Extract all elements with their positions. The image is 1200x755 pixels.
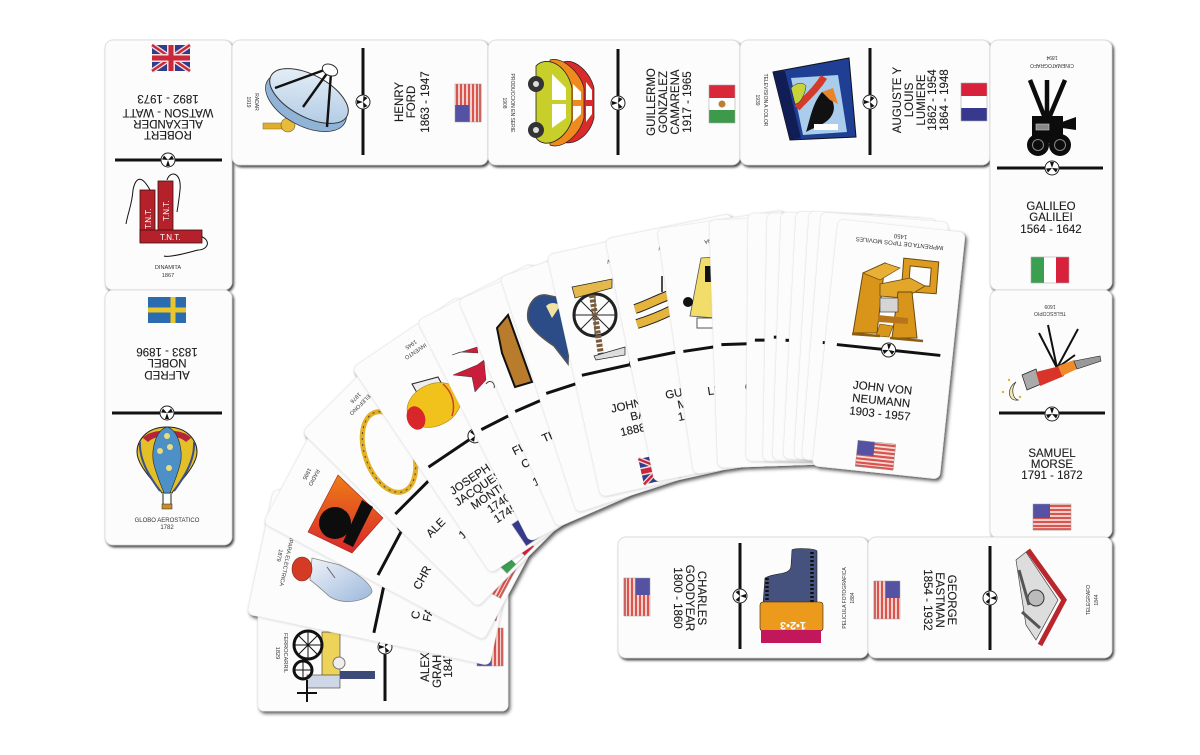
fan card: red swallow, FL: 1	[531, 476, 542, 489]
fan card: John Logie Baird, wheel press	[547, 227, 726, 497]
domino: Guillermo Gonzalez Camarena, mass production: GONZALEZ	[658, 71, 670, 133]
fan card: electric lamp: 1879	[275, 549, 283, 562]
icon: brown slab	[497, 315, 532, 387]
fan card: Alexander Graham Bell, railway: FERROCARRIL	[282, 633, 288, 673]
domino: Galileo Galilei, cinematograph	[990, 40, 1112, 290]
domino: Auguste y Louis Lumiere, color television	[740, 40, 990, 165]
fan card: radio: CHR	[412, 564, 434, 592]
domino: Robert Alexander Watson-Watt, dynamite	[105, 40, 232, 290]
icon: dynamite sticks: T.N.T.	[160, 233, 180, 242]
domino: Galileo Galilei, cinematograph: CINEMATOGRAFO	[1030, 62, 1074, 68]
domino: Henry Ford, radar: HENRY	[394, 82, 406, 122]
domino: Auguste y Louis Lumiere, color television: 1939	[754, 94, 760, 106]
domino: Auguste y Louis Lumiere, color television: LUMIERE	[916, 74, 928, 126]
icon: red bird shapes	[452, 347, 494, 392]
domino: George Eastman, telegraph: 1844	[1094, 594, 1100, 606]
fan card: yellow basket, GU: GRAV	[657, 242, 674, 251]
fan card: Alexander Graham Bell, railway: GRAHAM BELL	[432, 605, 444, 688]
domino: Robert Alexander Watson-Watt, dynamite: ROBERT	[144, 128, 192, 140]
domino: Guillermo Gonzalez Camarena, mass production: PRODUCCION EN SERIE	[509, 74, 515, 133]
fan card: radio: RADIO	[306, 468, 320, 487]
domino: Samuel Morse, telescope: TELESCOPIO	[1034, 310, 1066, 316]
fan card: brown slab, TH	[458, 249, 674, 527]
icon: yellow machine	[683, 257, 716, 328]
domino: Samuel Morse, telescope: 1791 - 1872	[1021, 470, 1083, 482]
domino: Guillermo Gonzalez Camarena, mass production	[488, 40, 740, 165]
domino: Auguste y Louis Lumiere, color television: LOUIS	[904, 82, 916, 117]
fan card: stacked blank card 1	[746, 213, 876, 462]
domino: Auguste y Louis Lumiere, color television: AUGUSTE Y	[892, 67, 904, 133]
domino: Galileo Galilei, cinematograph: GALILEI	[1029, 212, 1073, 224]
domino: Charles Goodyear, photographic film: GOODYEAR	[683, 565, 695, 631]
fan card: John Logie Baird, wheel press: 1888 - 1946	[619, 414, 682, 439]
fan card: electric lamp: 1	[435, 607, 448, 616]
domino: Alfred Nobel, hot air balloon: 1833 - 1896	[136, 345, 198, 357]
icon: television with toucan	[773, 58, 856, 140]
domino: Auguste y Louis Lumiere, color television: TELEVISION A COLOR	[762, 74, 768, 127]
icon: hot air balloon	[137, 427, 197, 509]
fan card: telephone, Alessandro: TELEFONO	[347, 390, 373, 416]
icon: yellow capsule	[400, 374, 468, 436]
icon: cars in series	[528, 59, 594, 146]
fan card: telephone, Alessandro	[302, 341, 568, 607]
fan card: stacked blank card 4	[783, 211, 924, 465]
domino: Charles Goodyear, photographic film	[618, 537, 868, 658]
fan card: Joseph Michel y Jacques Etienne Montgolfier: MONTGOLFIER	[469, 455, 546, 512]
fan card: brown slab, TH: TH	[540, 428, 559, 445]
fan card: yellow machine, LE: LE	[707, 384, 723, 398]
domino: George Eastman, telegraph: EASTMAN	[933, 572, 945, 628]
fan card: John von Neumann, movable type printing press: NEUMANN	[852, 393, 911, 411]
fan card: yellow basket, GU	[605, 213, 780, 482]
domino: Charles Goodyear, photographic film: 1884	[850, 592, 856, 604]
fan card: blue device	[500, 237, 698, 513]
fan card: Joseph Michel y Jacques Etienne Montgolfier: JOSEPH MICHEL Y	[448, 430, 540, 498]
domino: Charles Goodyear, photographic film: 1800 - 1860	[671, 567, 683, 629]
fan card: electric lamp	[247, 489, 516, 666]
fan card: John Logie Baird, wheel press: NOW	[606, 255, 621, 264]
domino: Auguste y Louis Lumiere, color television: 1864 - 1948	[939, 69, 951, 131]
domino: Alfred Nobel, hot air balloon	[105, 290, 232, 545]
fan card: red swallow, FL	[417, 263, 644, 542]
domino: Alfred Nobel, hot air balloon: 1782	[160, 525, 174, 531]
fan card: yellow basket, GU: M	[677, 398, 688, 412]
fan card: John von Neumann, movable type printing press: IMPRENTA DE TIPOS MOVILES	[856, 235, 944, 250]
domino: Samuel Morse, telescope	[990, 290, 1112, 538]
domino: George Eastman, telegraph: GEORGE	[945, 575, 957, 626]
icon: steam locomotive	[294, 631, 375, 702]
domino: Charles Goodyear, photographic film: PELICULA FOTOGRAFICA	[842, 567, 848, 629]
icon: dynamite sticks	[126, 174, 207, 256]
fan card: Joseph Michel y Jacques Etienne Montgolfier: INVENTO	[403, 341, 427, 361]
fan card: yellow machine, LE: MAQUINA	[704, 234, 731, 244]
domino: Alfred Nobel, hot air balloon: ALFRED	[144, 368, 190, 380]
icon: blue device	[528, 295, 570, 364]
fan card: stacked blank card 2	[763, 213, 895, 463]
domino: Robert Alexander Watson-Watt, dynamite: 1867	[162, 273, 174, 279]
domino: Galileo Galilei, cinematograph: GALILEO	[1026, 201, 1076, 213]
fan card: John Logie Baird, wheel press: BAIRD	[629, 404, 666, 424]
domino: Robert Alexander Watson-Watt, dynamite: DINAMITA	[155, 265, 181, 271]
domino: George Eastman, telegraph: 1854 - 1932	[921, 569, 933, 631]
fan card: telephone, Alessandro: 17	[457, 524, 474, 542]
domino: Charles Goodyear, photographic film: CHARLES	[695, 571, 707, 625]
fan card: stacked blank card 6	[802, 212, 949, 469]
domino: Henry Ford, radar: 1919	[245, 96, 251, 108]
domino: Galileo Galilei, cinematograph: 1894	[1046, 54, 1058, 60]
fan card: yellow basket, GU: 18	[677, 410, 692, 424]
domino: Alfred Nobel, hot air balloon: NOBEL	[147, 356, 186, 368]
fan card: John von Neumann, movable type printing press: JOHN VON	[852, 380, 913, 398]
fan card: yellow machine, LE	[657, 210, 820, 474]
fan card: Joseph Michel y Jacques Etienne Montgolfier: 1945	[404, 338, 418, 350]
fan card: Alexander Graham Bell, railway: ALEXANDER	[420, 612, 432, 682]
domino: Alfred Nobel, hot air balloon: GLOBO AEROSTATICO	[135, 518, 200, 524]
icon: telegraph key	[1016, 550, 1064, 645]
fan card: John Logie Baird, wheel press: JOHN LOGIE	[610, 389, 681, 416]
icon: radar dish	[256, 57, 357, 144]
domino: Robert Alexander Watson-Watt, dynamite: WATSON - WATT	[123, 106, 213, 118]
fan card: Joseph Michel y Jacques Etienne Montgolfier	[352, 296, 597, 574]
fan card: brown slab, TH: GUION A C	[510, 283, 539, 300]
fan card: stacked blank card 3	[772, 212, 909, 464]
domino: Robert Alexander Watson-Watt, dynamite: ALEXANDER	[133, 117, 203, 129]
fan card: Joseph Michel y Jacques Etienne Montgolfier: 1740 - 1810	[485, 472, 543, 516]
domino: Henry Ford, radar: 1863 - 1947	[420, 71, 432, 133]
icon: telescope	[1002, 325, 1101, 400]
domino: Henry Ford, radar: FORD	[406, 86, 418, 118]
fan card: Alexander Graham Bell, railway: 1847 - 1922	[443, 616, 455, 678]
domino: Henry Ford, radar	[232, 40, 488, 165]
fan card: John von Neumann, movable type printing press: 1450	[893, 232, 908, 239]
domino: Henry Ford, radar: RADAR	[253, 93, 259, 111]
icon: dynamite sticks: T.N.T.	[162, 201, 171, 221]
fan card: electric lamp: LAMPARA ELECTRICA	[278, 528, 296, 587]
fan card: Joseph Michel y Jacques Etienne Montgolfier: JACQUES ETIENNE	[453, 439, 549, 509]
domino: George Eastman, telegraph: TELEGRAFO	[1086, 585, 1092, 615]
icon: printing press	[852, 262, 935, 341]
fan card: G: G	[745, 382, 754, 394]
fan card: Alexander Graham Bell, railway	[258, 583, 508, 711]
fan card: red swallow, FL: FL	[511, 441, 528, 458]
icon: light bulb	[292, 557, 372, 601]
fan card: telephone, Alessandro: 1876	[349, 391, 362, 404]
icon: wheel machine	[572, 279, 625, 360]
fan card: G	[709, 216, 846, 468]
fan card: electric lamp: C	[410, 610, 423, 620]
fan card: electric lamp: FA	[421, 606, 436, 623]
fan card: stacked blank card 5	[794, 211, 937, 466]
fan card: red swallow, FL: C	[520, 457, 532, 471]
fan card: blue device: NDC	[560, 271, 573, 280]
domino: Samuel Morse, telescope: SAMUEL	[1028, 448, 1076, 460]
fan card: John von Neumann, movable type printing press	[812, 219, 965, 479]
icon: film roll	[760, 549, 823, 643]
domino: Auguste y Louis Lumiere, color television: 1862 - 1954	[927, 69, 939, 131]
icon: telephone cord loop	[352, 404, 426, 500]
domino: Guillermo Gonzalez Camarena, mass production: CAMARENA	[670, 69, 682, 135]
fan card: John von Neumann, movable type printing press: 1903 - 1957	[849, 405, 911, 424]
fan card: Joseph Michel y Jacques Etienne Montgolfier: 1745 - 1799	[492, 482, 550, 526]
icon: dynamite sticks: T.N.T.	[144, 209, 153, 229]
fan card: telephone, Alessandro: ALE	[424, 516, 448, 540]
fan card: Alexander Graham Bell, railway: 1829	[274, 647, 280, 659]
icon: film camera	[1027, 80, 1076, 156]
domino: George Eastman, telegraph	[868, 537, 1112, 658]
fan card: radio: 1895	[301, 467, 312, 480]
domino: Guillermo Gonzalez Camarena, mass production: 1908	[501, 97, 507, 109]
icon: film roll: 1•2•3	[780, 619, 806, 631]
fan card: radio: .	[435, 566, 447, 575]
icon: yellow curved band	[635, 276, 672, 324]
domino: Samuel Morse, telescope: MORSE	[1031, 459, 1073, 471]
domino: Guillermo Gonzalez Camarena, mass production: GUILLERMO	[646, 68, 658, 136]
domino: Samuel Morse, telescope: 1609	[1044, 303, 1056, 309]
domino: Galileo Galilei, cinematograph: 1564 - 1642	[1020, 224, 1082, 236]
fan card: radio: 1	[444, 571, 458, 582]
fan card: radio	[263, 410, 544, 640]
domino: Guillermo Gonzalez Camarena, mass production: 1917 - 1965	[682, 71, 694, 133]
fan card: yellow basket, GU: GU	[664, 387, 684, 402]
fan outer shadow silhouette	[247, 210, 965, 711]
domino: Robert Alexander Watson-Watt, dynamite: 1892 - 1973	[137, 92, 199, 104]
icon: radio set	[308, 475, 383, 553]
